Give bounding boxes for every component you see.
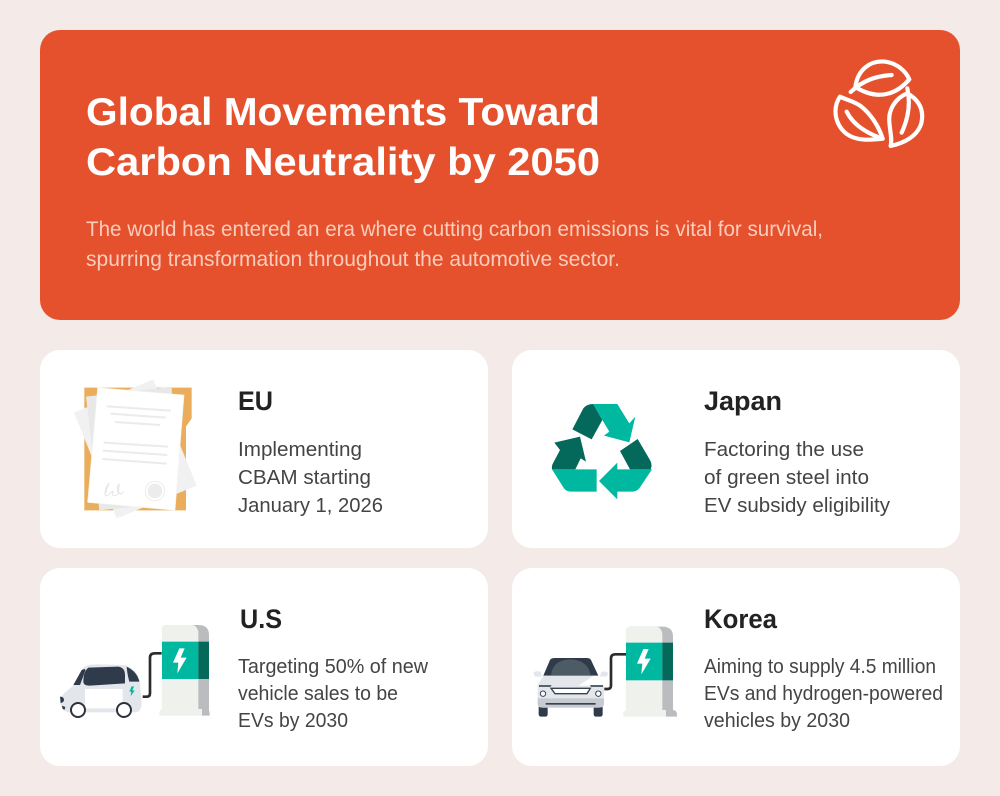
title: Global Movements Toward [86,91,600,134]
text: Japan body: of green steel into [704,466,869,489]
icon: electric car charging [60,625,210,717]
text: Japan body: EV subsidy eligibility [704,494,891,517]
text: Japan body [704,438,891,517]
text: Korea body: vehicles by 2030 [704,709,850,732]
text: EU body: CBAM starting [238,466,371,489]
text: U.S body: vehicle sales to be [238,682,398,705]
icon: SUV charging [533,627,677,717]
text: Korea body: EVs and hydrogen-powered [704,682,943,705]
text: U.S body: Targeting 50% of new [238,655,428,678]
car [533,658,608,717]
text: Japan body: Factoring the use [704,438,864,461]
text: EU body: January 1, 2026 [238,494,383,517]
icon: recycle arrows [552,404,652,499]
subtitle [86,218,823,271]
panel: header [40,30,960,320]
car [60,664,142,717]
text: Korea body [704,655,943,732]
icon: documents on folder [74,379,197,518]
text: U.S body: EVs by 2030 [238,709,348,732]
text: Korea body: Aiming to supply 4.5 million [704,655,936,678]
charging station [604,627,677,717]
heading: Japan: Japan [704,386,782,416]
text: U.S body [238,655,428,732]
title: Carbon Neutrality by 2050 [86,141,600,184]
icon: three leaves [836,61,922,146]
panel: Japan [512,350,960,548]
heading: U.S: U.S [240,604,282,634]
charging station [143,625,210,716]
heading: Korea: Korea [704,604,778,634]
panel: EU [40,350,488,548]
text: EU body [238,438,383,517]
panel: Korea [512,568,960,766]
subtitle: spurring transformation throughout the automotive sector. [86,248,620,271]
heading: EU: EU [238,386,273,416]
subtitle: The world has entered an era where cutting carbon emissions is vital for survival, [86,218,823,241]
title [86,91,600,184]
panel: U.S [40,568,488,766]
text: EU body: Implementing [238,438,362,461]
